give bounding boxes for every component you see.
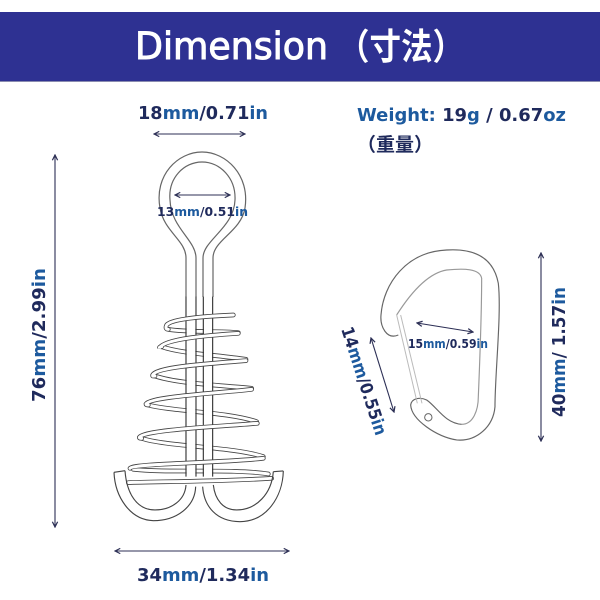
carabiner gate <box>397 315 422 403</box>
title: Dimension <box>135 25 328 68</box>
label: gate opening: 14mm/0.55in <box>336 324 390 438</box>
anchor feet <box>114 471 283 522</box>
header band <box>0 12 600 82</box>
arrow: gate opening <box>371 338 394 412</box>
label: inner width: 15mm/0.59in <box>408 336 488 351</box>
arrow: total height <box>54 155 56 527</box>
anchor loop and rods <box>159 152 246 297</box>
label: top width: 18mm/0.71in <box>138 103 268 124</box>
carabiner outer body <box>381 250 499 440</box>
label: loop inner width: 13mm/0.51in <box>157 204 248 219</box>
label: carabiner height: 40mm/ 1.57in <box>549 287 570 417</box>
drawing: screw anchor <box>114 152 283 522</box>
label: total height: 76mm/2.99in <box>29 268 50 402</box>
spring coil <box>128 297 272 483</box>
arrow: inner width <box>417 323 473 332</box>
drawing: carabiner <box>381 250 499 440</box>
label: bottom width: 34mm/1.34in <box>137 565 269 586</box>
carabiner rivet <box>425 414 432 421</box>
title CJK: （寸法） <box>338 18 464 70</box>
label: weight CJK: （重量） <box>357 130 433 157</box>
label: weight: Weight: 19g / 0.67oz <box>357 105 566 126</box>
arrow: bottom width <box>115 550 289 552</box>
arrow: loop inner width <box>175 194 230 196</box>
carabiner inner body <box>397 269 482 424</box>
arrow: carabiner height <box>540 253 542 441</box>
arrow: top width <box>154 133 245 135</box>
